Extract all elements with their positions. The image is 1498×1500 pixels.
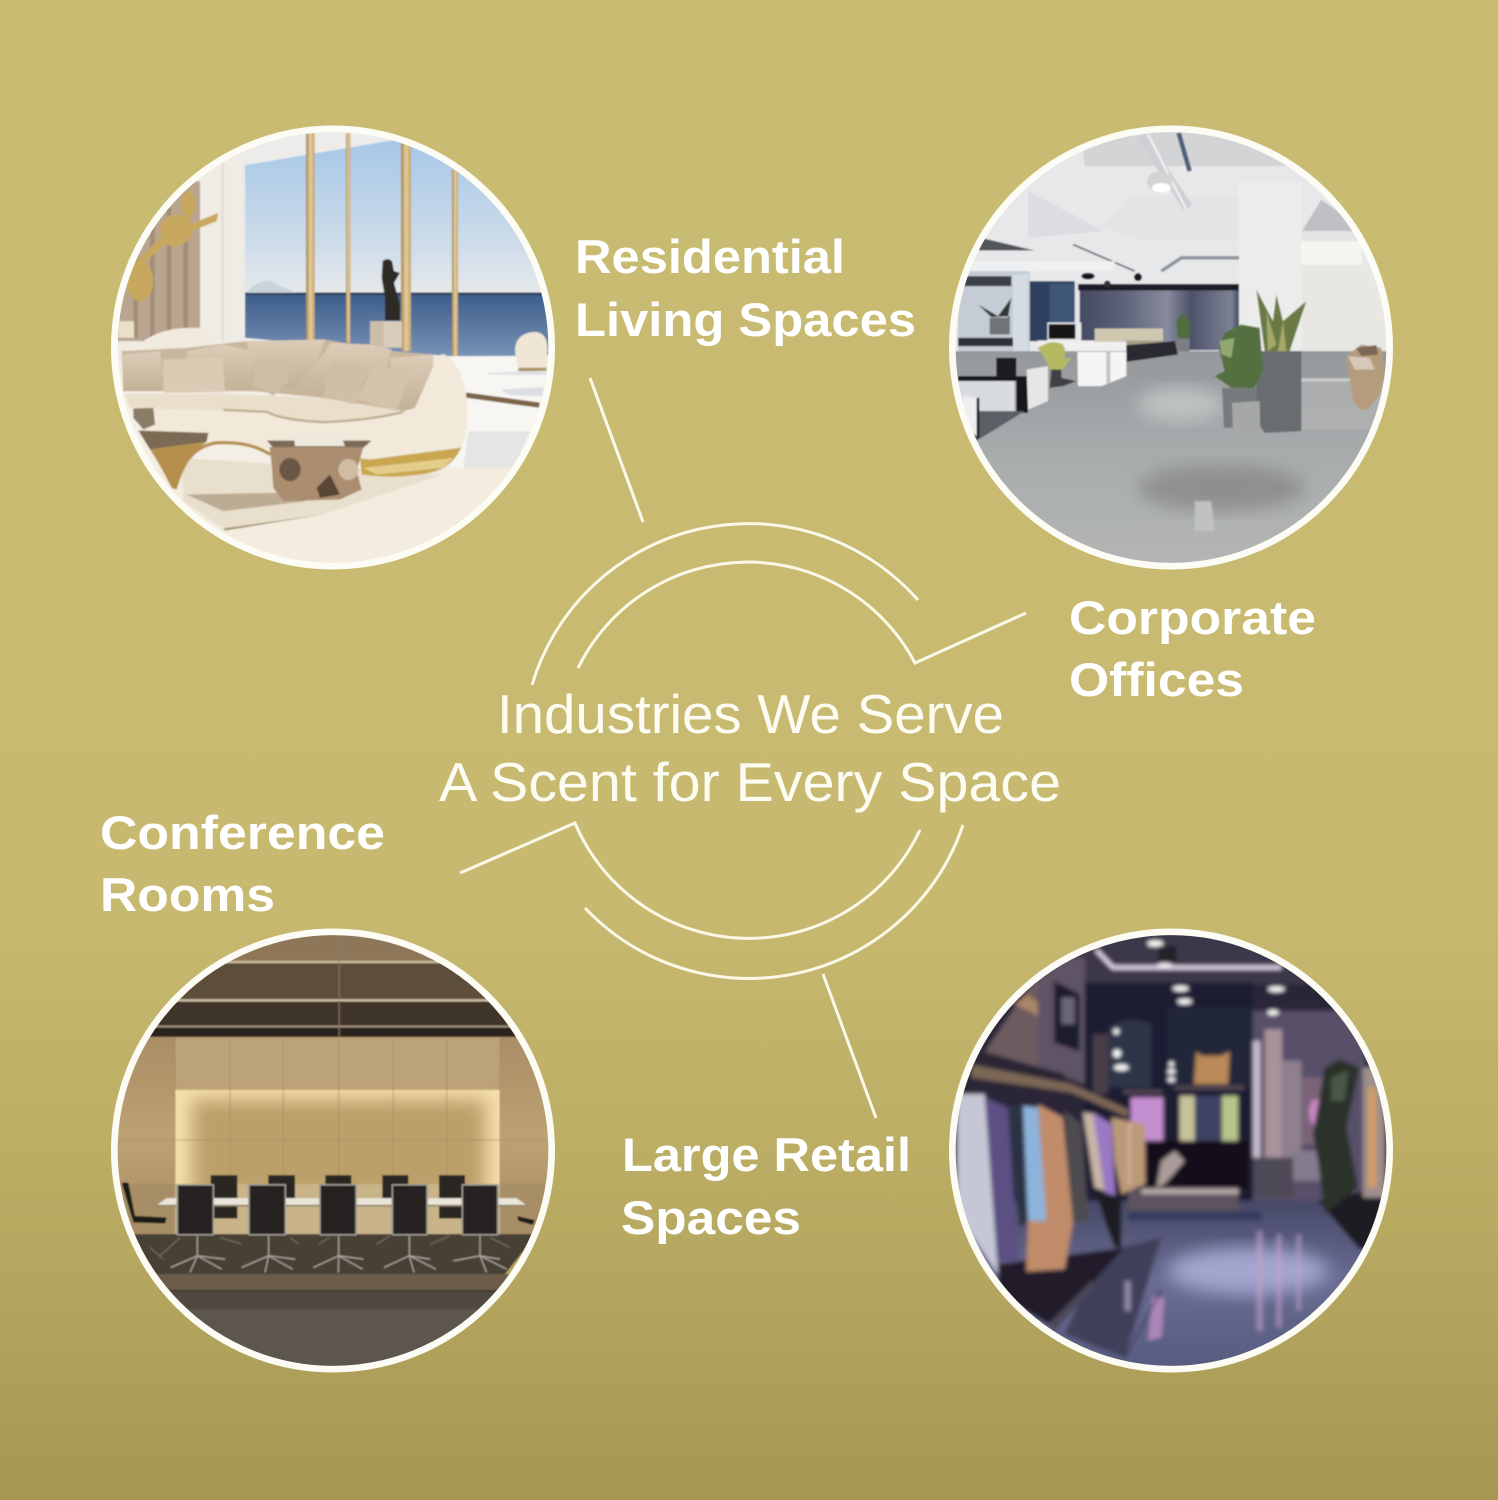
photo: large retail space [948, 928, 1395, 1374]
photo: corporate office [948, 124, 1395, 571]
label: large retail spaces [621, 1128, 911, 1244]
label: residential living spaces [575, 230, 916, 346]
connector: residential [590, 378, 643, 522]
photo: residential living space [110, 124, 557, 571]
connector: retail [823, 974, 876, 1118]
label: conference rooms: Conference [100, 806, 385, 859]
title [439, 683, 1061, 813]
label: conference rooms [100, 806, 385, 921]
photo: conference room [110, 928, 557, 1376]
label: corporate offices: Offices [1069, 653, 1244, 706]
title: Industries We Serve [497, 683, 1004, 745]
central ring arcs [460, 524, 1026, 978]
label: conference rooms: Rooms [100, 868, 275, 921]
label: large retail spaces: Large Retail [622, 1128, 911, 1181]
title: A Scent for Every Space [439, 751, 1061, 813]
label: large retail spaces: Spaces [621, 1191, 801, 1244]
label: residential living spaces: Living Spaces [575, 293, 916, 346]
label: residential living spaces: Residential [575, 230, 845, 283]
label: corporate offices [1069, 591, 1316, 706]
label: corporate offices: Corporate [1069, 591, 1316, 644]
